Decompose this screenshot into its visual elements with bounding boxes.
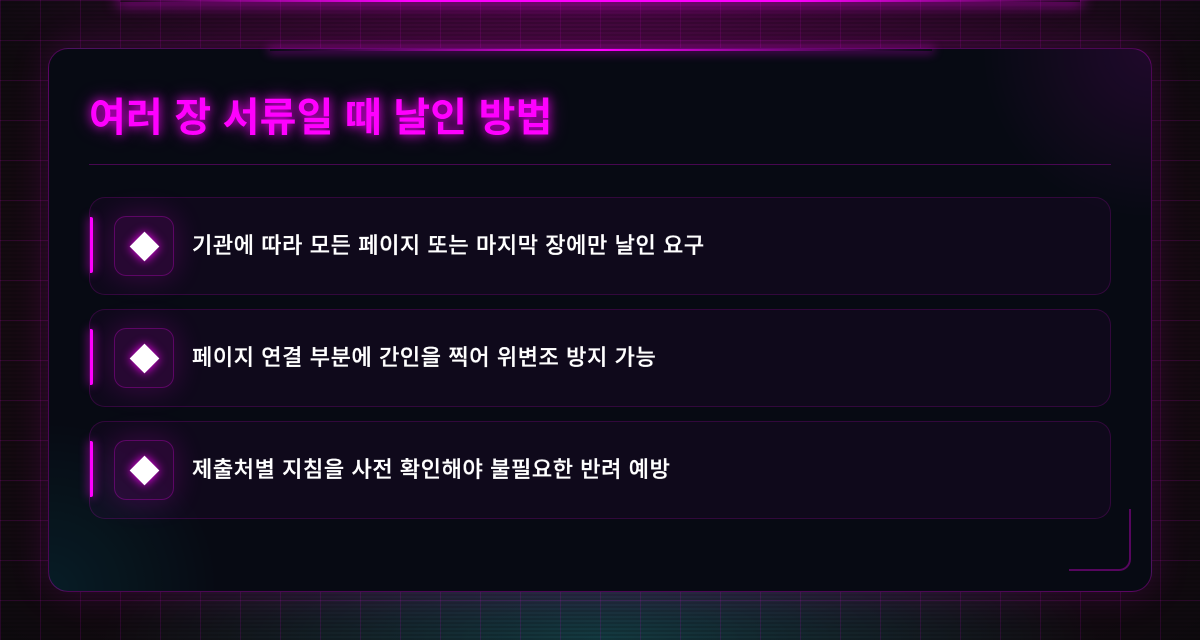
list item 1: [89, 197, 1111, 295]
item 1 accent bar: [90, 217, 93, 273]
card top neon bar: [270, 49, 932, 51]
panel: main card: [48, 48, 1152, 592]
item 2 text: 페이지 연결 부분에 간인을 찍어 위변조 방지 가능: [192, 345, 656, 370]
item 3 accent bar: [90, 441, 93, 497]
item 3 text: 제출처별 지침을 사전 확인해야 불필요한 반려 예방: [192, 457, 670, 482]
list item 3: [89, 421, 1111, 519]
icon: diamond 1: [114, 216, 174, 276]
top neon bar: [120, 0, 1080, 2]
item 2 accent bar: [90, 329, 93, 385]
list item 2: [89, 309, 1111, 407]
icon: diamond 3: [114, 440, 174, 500]
icon: diamond 2: [114, 328, 174, 388]
item 1 text: 기관에 따라 모든 페이지 또는 마지막 장에만 날인 요구: [192, 233, 705, 258]
title: 여러 장 서류일 때 날인 방법: [89, 96, 553, 140]
corner bracket: [1069, 509, 1131, 571]
